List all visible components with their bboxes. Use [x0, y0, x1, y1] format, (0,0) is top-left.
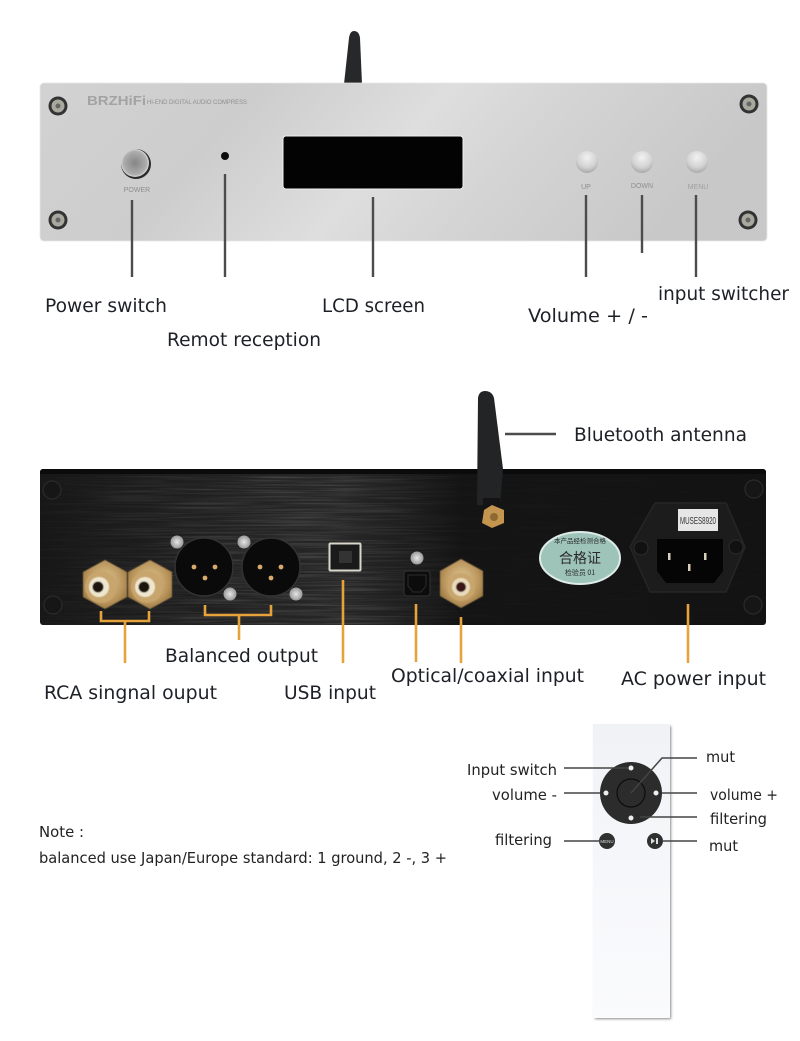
icon: USB port — [330, 544, 360, 570]
remote callout lines — [564, 758, 697, 841]
icon: RCA connectors — [83, 560, 172, 609]
remote control — [593, 724, 671, 1019]
icon: AC power inlet — [630, 503, 745, 592]
icon: panel buttons: MENU — [688, 184, 708, 191]
icon: certificate sticker: 本产品经检测合格 — [554, 535, 606, 545]
icon: power knob — [121, 149, 151, 194]
label: mut bottom: mut — [709, 837, 738, 855]
label: LCD screen: LCD screen — [322, 295, 425, 317]
icon: bluetooth antenna — [477, 391, 504, 528]
label: Optical/coaxial input: Optical/coaxial input — [391, 665, 584, 687]
LCD screen — [283, 136, 463, 189]
icon: power knob: POWER — [124, 187, 150, 194]
icon: XLR connectors — [170, 536, 302, 600]
icon: remote receiver — [221, 152, 229, 160]
note text block: balanced use Japan/Europe standard: 1 ground, 2 -, 3 + — [39, 849, 447, 867]
label: USB input: USB input — [284, 682, 376, 704]
logo text — [87, 93, 248, 108]
icon: coaxial input — [440, 559, 483, 608]
logo text: BRZHiFi — [87, 93, 146, 108]
label: mut top: mut — [706, 748, 735, 766]
icon: remote d-pad — [600, 762, 662, 824]
logo text: HI-END DIGITAL AUDIO COMPRESS — [147, 99, 248, 106]
label: Bluetooth antenna: Bluetooth antenna — [574, 424, 747, 446]
icon: panel buttons: DOWN — [631, 183, 653, 190]
icon: AC power inlet: MUSES8920 — [680, 516, 716, 527]
label: Power switch: Power switch — [45, 295, 167, 317]
panel: back face of device — [40, 469, 766, 625]
icon: certificate sticker — [540, 532, 620, 584]
label: volume plus: volume + — [710, 786, 778, 804]
note text block — [39, 823, 447, 867]
label: RCA signal output: RCA singnal ouput — [44, 682, 217, 704]
label: Balanced output: Balanced output — [165, 645, 318, 667]
icon: certificate sticker: 合格证 — [559, 548, 601, 568]
label: AC power input: AC power input — [621, 668, 766, 690]
icon: optical input — [404, 552, 430, 596]
note text block: Note : — [39, 823, 84, 841]
label: volume minus: volume - — [492, 786, 557, 804]
front callout lines — [132, 174, 696, 277]
icon: panel buttons: UP — [581, 184, 591, 191]
label: input switcher: input switcher — [658, 283, 789, 305]
icon: remote play button — [647, 833, 663, 849]
back callout lines — [101, 580, 688, 663]
label: filtering left: filtering — [495, 831, 552, 849]
panel: front face of device — [40, 83, 767, 241]
icon: front panel antenna — [344, 31, 362, 84]
label: Input switch: Input switch — [467, 761, 557, 779]
label: Remot reception: Remot reception — [167, 329, 321, 351]
icon: remote menu button: MENU — [600, 839, 614, 844]
bluetooth callout line — [505, 433, 556, 435]
icon: panel screws — [48, 94, 758, 230]
icon: panel buttons — [576, 151, 708, 191]
label: Volume: Volume + / - — [528, 305, 648, 327]
label: filtering right: filtering — [710, 810, 767, 828]
icon: back panel screws — [43, 480, 763, 614]
icon: certificate sticker: 检验员 01 — [565, 568, 595, 578]
icon: remote menu button — [599, 833, 615, 849]
